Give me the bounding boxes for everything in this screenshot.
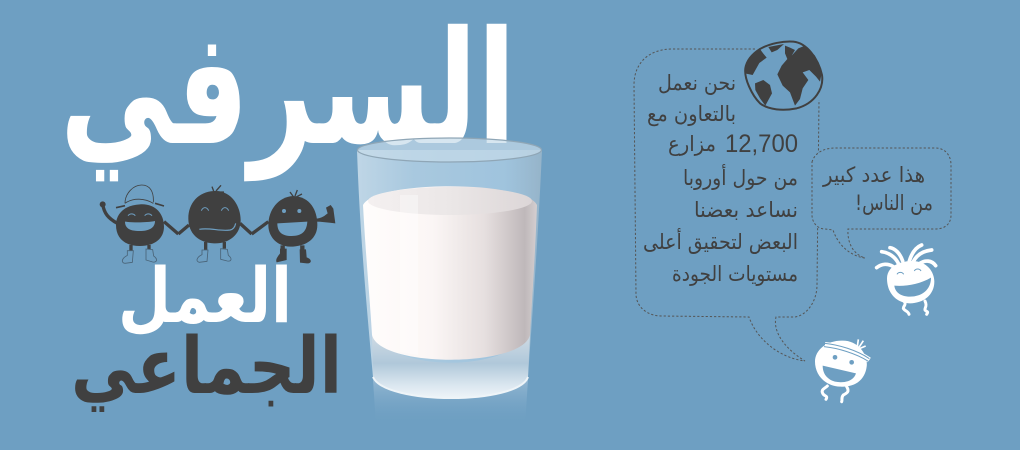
glass base: [372, 335, 530, 398]
line 2: بالتعاون مع: [647, 102, 736, 126]
line 6: البعض لتحقيق أعلى: [643, 228, 798, 254]
speech bubble: reply: [812, 148, 951, 258]
glass of milk: [357, 138, 542, 425]
line 1: نحن نعمل: [658, 71, 736, 95]
character flexing arm: [252, 190, 335, 263]
milk: [363, 186, 537, 360]
line 3: number: 12,700: [725, 130, 798, 158]
glass body: [357, 150, 542, 398]
glass rim: [358, 138, 542, 162]
reply line 1: هذا عدد كبير: [822, 163, 925, 187]
glass bottom edge: [373, 377, 528, 398]
title: السرفي: السرفي: [60, 0, 516, 182]
line 7: مستويات الجودة: [672, 262, 798, 286]
line 4: من حول أوروبا: [683, 164, 798, 190]
milk surface: [368, 187, 532, 215]
line 3: farmers: مزارع: [668, 132, 716, 156]
line 5: نساعد بعضنا: [694, 198, 798, 222]
milk highlight: [400, 195, 418, 355]
speech bubble: main: [634, 49, 819, 361]
main bubble text: [643, 71, 798, 286]
white character with dreadlocks: [877, 245, 936, 314]
white character with headband: [815, 339, 869, 402]
heading: العمل: العمل: [118, 251, 292, 340]
character with cap: [100, 185, 178, 263]
heading: الجماعي: الجماعي: [71, 322, 342, 412]
icon: globe: [745, 42, 822, 110]
glass reflection: [373, 380, 528, 425]
character with wavy mouth: [178, 185, 252, 262]
reply line 2: من الناس!: [855, 191, 933, 215]
reply bubble text: [822, 163, 933, 215]
three dark characters holding hands: [100, 185, 335, 263]
